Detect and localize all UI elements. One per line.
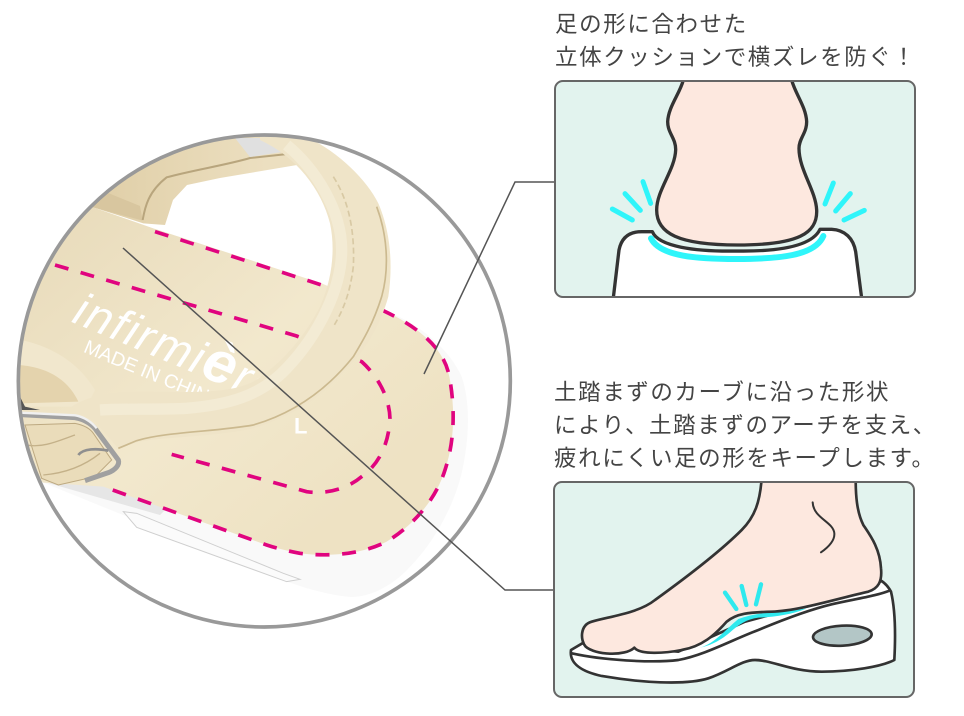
lower strap seams: [27, 435, 100, 475]
text: top caption: [555, 12, 917, 70]
text: bottom caption: [554, 380, 937, 471]
panel: heel cross-section: [555, 80, 915, 303]
leader line to bottom panel: [123, 248, 555, 590]
text: bottom caption: により、土踏まずのアーチを支え、: [554, 413, 937, 438]
mesh patch: [235, 138, 282, 157]
heel interior: [18, 365, 78, 403]
arch ticks: [725, 584, 761, 609]
dark gap: [20, 398, 40, 410]
pink dashed outline inner: [55, 265, 390, 492]
cyan contact band: [651, 236, 823, 259]
ankle bone: [813, 502, 834, 552]
strap highlight: [100, 145, 342, 410]
upper left lining: [93, 137, 296, 225]
lining crease: [93, 194, 142, 220]
white sole: [43, 310, 468, 597]
heel arch: [21, 340, 74, 406]
lining stitching: [143, 153, 293, 220]
main strap: [184, 137, 390, 401]
foot: [657, 80, 817, 245]
strap outer seam: [118, 207, 386, 448]
buckle highlight: [21, 413, 97, 428]
lower strap: [25, 423, 112, 485]
text: top caption: 立体クッションで横ズレを防ぐ！: [555, 45, 917, 70]
text: bottom caption: 疲れにくい足の形をキープします。: [554, 446, 936, 471]
footbed: [0, 195, 453, 555]
cushion: [613, 229, 862, 303]
brand text: infirmière: [66, 274, 292, 418]
circle border: [18, 135, 510, 627]
vent oval: [813, 624, 872, 647]
sole grey edge: [49, 483, 164, 515]
brand text: L: [294, 413, 307, 438]
sole side vent: [123, 512, 300, 582]
text: top caption: 足の形に合わせた: [555, 12, 748, 37]
text: bottom caption: 土踏まずのカーブに沿った形状: [554, 380, 890, 405]
leader line to top panel: [424, 182, 555, 374]
pressure ticks: [612, 182, 864, 220]
buckle: [21, 415, 119, 481]
cyan arch support: [700, 608, 807, 648]
brand text: MADE IN CHINA: [81, 337, 224, 412]
insole line: [572, 590, 891, 661]
panel: foot side view: [554, 478, 914, 697]
foot: [582, 478, 881, 654]
buckle pin: [78, 449, 108, 455]
sandal sole: [571, 581, 895, 683]
strap middle stitching: [333, 177, 354, 327]
pink dashed outline outer: [103, 232, 453, 555]
magnified sandal circle: [0, 120, 510, 627]
